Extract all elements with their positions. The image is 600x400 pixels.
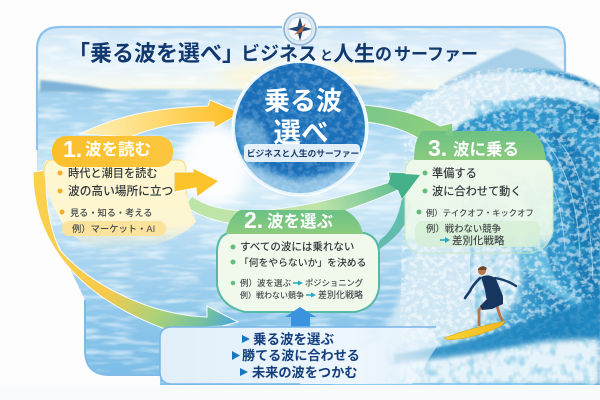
list: step 1 bullets: 波の高い場所に立つ bbox=[68, 184, 173, 198]
list: step 2 bullets: すべての波には乗れない bbox=[240, 240, 354, 253]
examples: step 2: 例）戦わない競争 bbox=[240, 290, 304, 300]
panel: bottom summary box bbox=[160, 327, 437, 384]
panel: step 3 ride the wave bbox=[388, 123, 553, 253]
header: step 3 bbox=[414, 123, 546, 161]
arrow: lower arc from step 1 to step 3 bbox=[184, 172, 420, 226]
chart: center globe bbox=[232, 60, 368, 196]
arrow: blue up arrow into step 2 bbox=[285, 307, 316, 327]
list: step 1 bullets bbox=[58, 166, 173, 218]
examples: step 2 bbox=[231, 278, 364, 300]
title: と bbox=[320, 48, 333, 63]
title bbox=[68, 41, 478, 66]
header: step 3: 3. bbox=[428, 135, 447, 161]
heading: globe title: 選べ bbox=[274, 117, 328, 148]
title: サーファー bbox=[394, 45, 478, 64]
example pill: step 3: 例）戦わない競争 bbox=[426, 223, 502, 234]
header: step 2: 波を選ぶ bbox=[267, 212, 334, 231]
list: step 2 bullets: 「何をやらないか」を決める bbox=[239, 256, 366, 269]
arrow: small yellow pointer to step 2 bbox=[174, 168, 219, 197]
title: 人生 bbox=[333, 43, 375, 66]
panel: step 2 choose the wave bbox=[217, 207, 379, 312]
list: step 1 bullets: 時代と潮目を読む bbox=[68, 166, 158, 180]
icon: surfboard bbox=[444, 321, 505, 340]
list: step 2 bullets bbox=[230, 240, 366, 269]
label: globe subtitle band: ビジネスと人生のサーファー bbox=[247, 148, 359, 158]
arrow: yellow arc from step 1 to center bbox=[80, 100, 241, 137]
illustration: surfer on yellow board bbox=[444, 266, 516, 340]
heading: globe title bbox=[264, 86, 342, 148]
list: summary lines: 勝てる波に合わせる bbox=[242, 347, 360, 363]
list: step 3 bullets bbox=[416, 166, 534, 218]
list: summary lines: 未来の波をつかむ bbox=[252, 364, 358, 380]
header: step 1 bbox=[52, 136, 173, 167]
mountain: distant peak bbox=[440, 48, 565, 120]
panel: step 1 read the wave bbox=[44, 136, 219, 252]
example pill: step 1: 例）マーケット・AI bbox=[72, 223, 155, 234]
list: step 3 bullets: 波に合わせて動く bbox=[432, 184, 522, 198]
heading: globe title: 乗る波 bbox=[264, 86, 342, 116]
arrow: large swoosh to bottom box bbox=[33, 170, 238, 329]
list: summary lines bbox=[232, 331, 360, 380]
arrow: green arc from center to step 3 bbox=[364, 105, 453, 138]
list: step 1 bullets: 見る・知る・考える bbox=[70, 207, 152, 218]
header: step 2: 2. bbox=[244, 207, 263, 233]
title: ビジネス bbox=[241, 43, 317, 65]
list: summary lines: 乗る波を選ぶ bbox=[253, 331, 334, 347]
title: 「乗る波を選べ」 bbox=[68, 41, 244, 66]
examples: step 2: ポジショニング bbox=[305, 278, 364, 288]
list: step 3 bullets: 例）テイクオフ・キックオフ bbox=[426, 208, 534, 218]
title: の bbox=[375, 45, 392, 64]
header: step 3: 波に乗る bbox=[453, 140, 519, 159]
example pill: step 3 bbox=[415, 221, 540, 247]
header: step 1: 1. bbox=[63, 136, 82, 162]
header: step 1: 波を読む bbox=[85, 140, 151, 159]
examples: step 2: 例）波を選ぶ bbox=[240, 278, 292, 288]
arrow: green return arc under step 2 right side bbox=[375, 196, 412, 252]
example pill: step 1 bbox=[62, 221, 166, 236]
arrow: green tip over step 3 panel bbox=[388, 173, 420, 199]
example pill: step 3: 差別化戦略 bbox=[452, 234, 505, 247]
panel: ocean scene frame bbox=[37, 27, 565, 387]
header: step 2 bbox=[226, 207, 363, 234]
examples: step 2: 差別化戦略 bbox=[318, 289, 363, 300]
list: step 3 bullets: 準備する bbox=[432, 166, 477, 180]
icon: compass bbox=[284, 13, 316, 45]
